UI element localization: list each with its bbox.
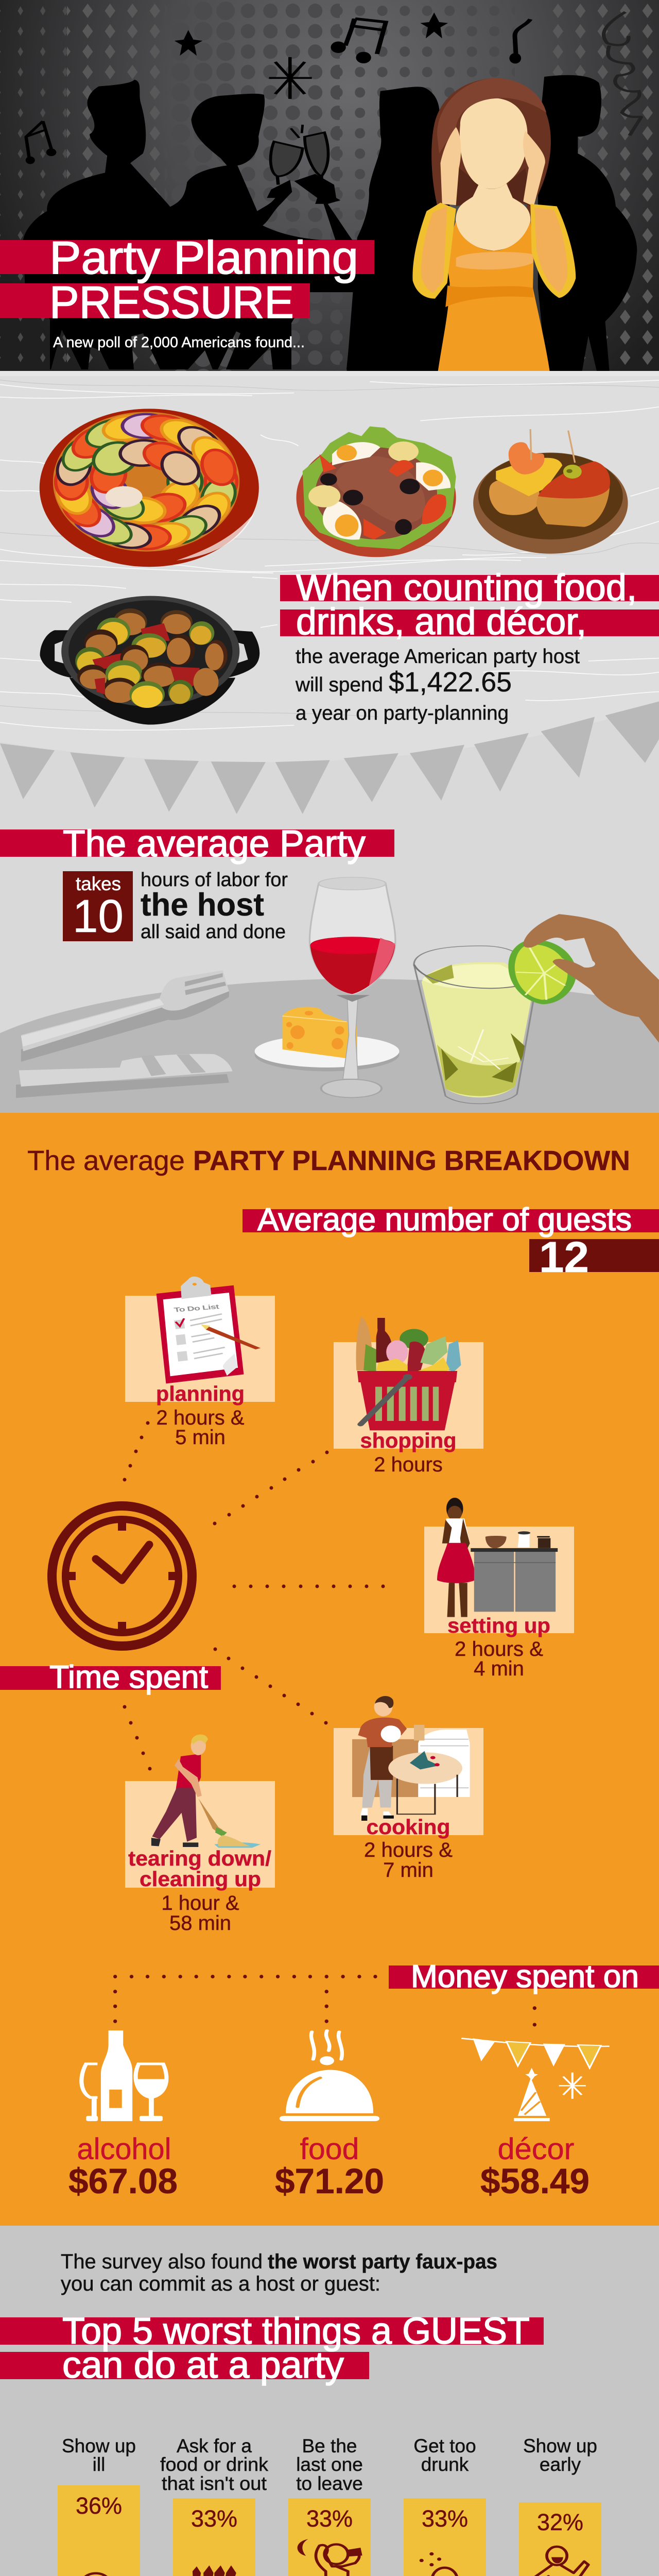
icon: lime cocktail [414, 940, 577, 1104]
icon: fork and knife [16, 970, 232, 1098]
guest percentages: 33% [422, 2505, 468, 2532]
panel: faux-pas [0, 2226, 659, 2576]
duration: planning: 2 hours & [157, 1406, 245, 1429]
callout text with spend figure: $1,422.65 [389, 667, 512, 698]
icon: ratatouille plate [40, 409, 259, 567]
dotted connectors from clock [123, 1421, 385, 1770]
woman with hands on temples [412, 78, 576, 371]
callout heading: When counting food, [296, 567, 637, 608]
guest percentages [76, 2493, 583, 2535]
amount: decor: $58.49 [480, 2161, 589, 2201]
average guests: 12 [539, 1233, 589, 1281]
wood grain [0, 380, 659, 730]
hours text: all said and done [141, 921, 286, 943]
intro text: you can commit as a host or guest: [61, 2273, 380, 2295]
label: setting up: setting up [447, 1614, 550, 1637]
money: alcohol [68, 2030, 178, 2201]
icon: wine bottle and glasses [81, 2030, 167, 2121]
heading: guest: Top 5 worst things a GUEST [62, 2311, 530, 2352]
hours text: hours of labor for [141, 869, 288, 891]
dotted connectors to money icons [113, 1975, 536, 2026]
duration: shopping: 2 hours [374, 1453, 443, 1476]
title [49, 232, 358, 328]
step: planning [125, 1277, 275, 1449]
duration: setting up: 2 hours & [455, 1638, 543, 1660]
callout text with spend figure: will spend [295, 674, 383, 696]
guest labels: Get too [413, 2435, 476, 2456]
duration: cooking: 7 min [383, 1859, 433, 1882]
icon: hand holding lime [523, 914, 659, 1043]
intro text: The survey also found [61, 2250, 263, 2273]
chart: guest faux-pas [41, 2435, 618, 2576]
label: cooking: cooking [367, 1815, 450, 1839]
money: decor [461, 2038, 610, 2201]
hours text [141, 869, 288, 943]
step: tearing down [125, 1735, 275, 1935]
hours box: 10 [73, 891, 124, 942]
panel: the average party [0, 814, 659, 1113]
step: setting up [424, 1498, 574, 1680]
icon: person mopping [151, 1735, 261, 1848]
guest labels: food or drink [160, 2454, 269, 2475]
duration: tearing down [161, 1892, 239, 1935]
subtitle: A new poll of 2,000 Americans found... [53, 334, 305, 351]
amount: alcohol: $67.08 [68, 2161, 178, 2201]
duration: planning: 5 min [175, 1426, 226, 1449]
guest icons [68, 2539, 588, 2576]
guest labels: that isn't out [162, 2473, 267, 2494]
time spent label: Time spent [49, 1659, 208, 1695]
guest labels: Show up [523, 2435, 597, 2456]
icon: clipboard [157, 1277, 261, 1384]
label: tearing down / cleaning up [128, 1846, 271, 1891]
label: shopping: shopping [360, 1429, 456, 1452]
duration: planning [157, 1406, 245, 1449]
callout text with spend figure: a year on party-planning [296, 702, 509, 724]
table surface [0, 979, 659, 1113]
icon: nicoise salad plate [296, 427, 456, 557]
duration: tearing down: 1 hour & [161, 1892, 239, 1914]
money: food [275, 2030, 384, 2201]
icon: clipboard: To Do List [174, 1303, 220, 1314]
silhouettes: lower bodies [25, 273, 360, 369]
money spent label: Money spent on [411, 1959, 639, 1994]
tablecloth edge with bunting [0, 702, 659, 814]
icon: bunting and party hat [461, 2038, 610, 2121]
guest labels: Ask for a [177, 2435, 252, 2456]
icon: man cooking [352, 1696, 470, 1821]
guest percentages: 36% [76, 2493, 122, 2519]
callout bars [280, 575, 659, 636]
heading: guest: can do at a party [62, 2345, 344, 2386]
callout text with spend figure [295, 646, 580, 724]
panel: wooden table with food [0, 371, 659, 814]
heading: The average [27, 1145, 185, 1176]
guest labels: last one [296, 2454, 363, 2475]
duration: setting up: 4 min [474, 1657, 524, 1680]
icon: clock [52, 1506, 192, 1646]
step: shopping [334, 1316, 483, 1476]
callout text with spend figure: the average American party host [296, 646, 580, 668]
intro text: the worst party faux-pas [268, 2250, 497, 2273]
title bars [0, 240, 374, 318]
duration: cooking: 2 hours & [364, 1839, 453, 1861]
label: planning: planning [156, 1382, 245, 1405]
amount: food: $71.20 [275, 2161, 384, 2201]
hours box: takes [76, 873, 121, 894]
duration: tearing down: 58 min [169, 1912, 231, 1935]
label: food: food [300, 2132, 359, 2166]
average guests: Average number of guests [257, 1202, 632, 1238]
party decorations: notes, stars, streamer, toasting glasses [26, 12, 641, 185]
icon: cheese on plate [255, 1007, 399, 1071]
guest labels: Show up [62, 2435, 136, 2456]
icon: cast-iron pot [40, 596, 259, 725]
guest labels: ill [93, 2454, 105, 2475]
guest percentages: 33% [306, 2505, 353, 2532]
duration: cooking [364, 1839, 453, 1882]
label: decor: décor [497, 2132, 575, 2166]
title: Party Planning [49, 232, 358, 284]
icon: tapas plate [473, 429, 628, 554]
label: tearing down / cleaning up: tearing down/ [128, 1846, 271, 1870]
step: cooking [334, 1696, 483, 1882]
title: PRESSURE [49, 277, 294, 328]
guest labels: to leave [296, 2473, 363, 2494]
guest labels: early [540, 2454, 581, 2475]
callout heading: drinks, and décor, [296, 601, 586, 642]
icon: woman at kitchen counter [437, 1498, 558, 1617]
icon: shopping basket [356, 1316, 461, 1430]
callout heading [296, 567, 637, 642]
hours box [63, 871, 133, 942]
duration: setting up [455, 1638, 543, 1680]
guest labels: Be the [302, 2435, 357, 2456]
intro text [61, 2250, 497, 2295]
heading bar [0, 829, 394, 857]
icon: red wine glass [309, 877, 395, 1097]
guest percentages: 33% [191, 2505, 237, 2532]
label: tearing down / cleaning up: cleaning up [140, 1867, 261, 1891]
heading: The average Party [63, 823, 366, 865]
party silhouettes [23, 75, 637, 371]
hours text: the host [141, 887, 264, 923]
panel: party planning breakdown [0, 1113, 659, 2226]
guest labels: drunk [421, 2454, 469, 2475]
icon: serving cloche [280, 2030, 379, 2121]
panel: hero [0, 0, 659, 371]
heading: PARTY PLANNING BREAKDOWN [193, 1145, 630, 1176]
average guests [242, 1202, 659, 1281]
guest percentages: 32% [537, 2509, 583, 2535]
label: alcohol: alcohol [77, 2132, 171, 2166]
heading: guest [0, 2311, 544, 2386]
guest labels [62, 2435, 597, 2494]
